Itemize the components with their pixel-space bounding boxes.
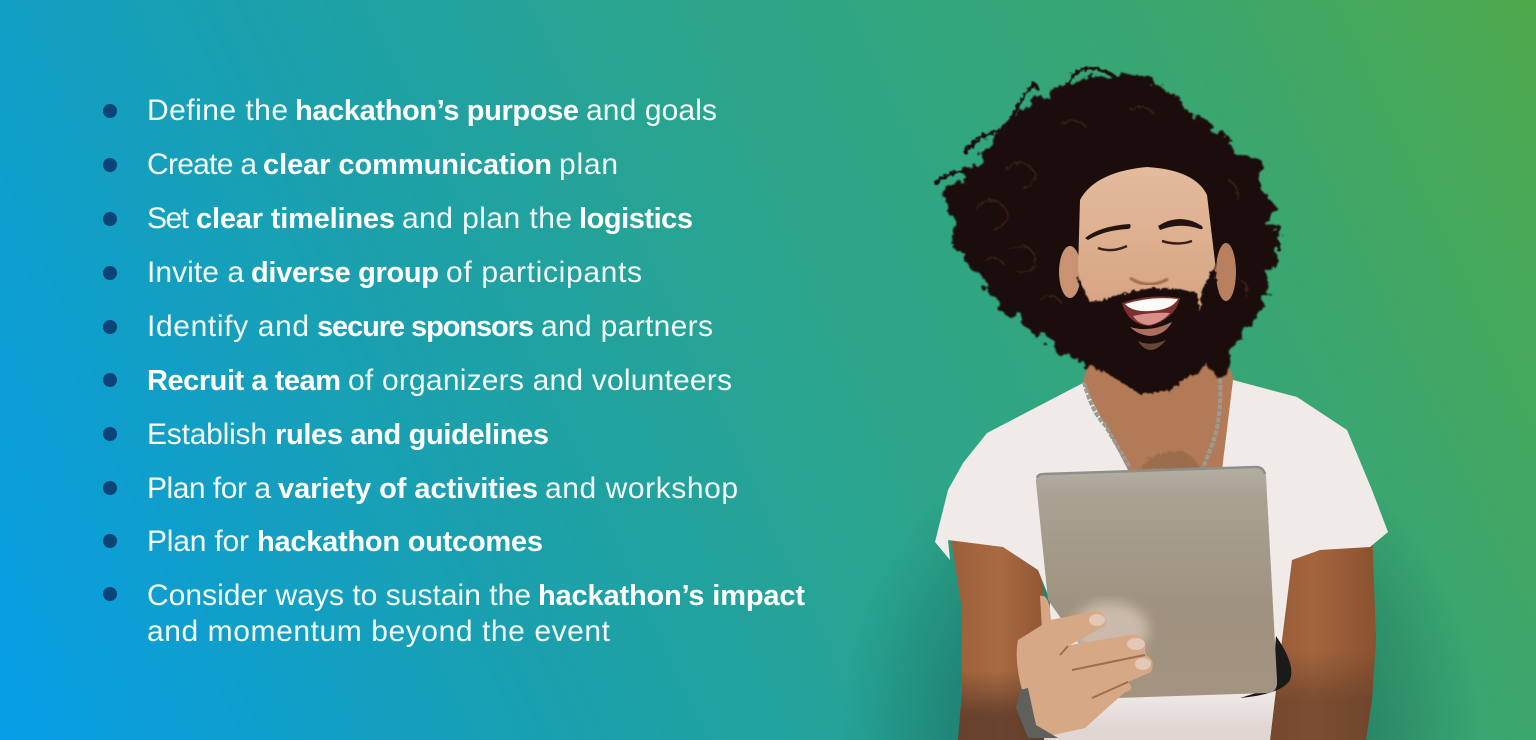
item: sustain impact: hackathon’s impact (538, 580, 805, 612)
item: outcomes (103, 525, 543, 558)
item: rules (103, 418, 549, 451)
person (935, 68, 1388, 740)
mouth (1122, 296, 1180, 326)
item: participants: Invite a (147, 256, 244, 289)
item: sustain impact (103, 579, 805, 648)
closed left eye (1098, 246, 1127, 250)
item: purpose: Define the (147, 94, 288, 127)
person shadow (840, 400, 1480, 740)
checklist (103, 94, 805, 648)
item: timelines: and plan the (402, 202, 572, 235)
watch (1016, 688, 1058, 738)
item: purpose: hackathon’s purpose (295, 95, 579, 127)
left forearm shade (958, 670, 1046, 740)
left arm (948, 520, 1048, 740)
item: sustain impact: Consider ways to sustain the (147, 579, 531, 612)
item: sponsors (103, 310, 713, 343)
shirt bottom shade (1044, 690, 1276, 740)
item: outcomes: hackathon outcomes (257, 526, 543, 558)
finger nails (1089, 614, 1151, 670)
item: participants (103, 256, 642, 289)
right ear (1216, 243, 1236, 301)
item: team (103, 364, 732, 397)
lip below mouth (1130, 322, 1172, 336)
item: communication: clear communication (263, 149, 552, 181)
item: activities: and workshop (545, 472, 738, 505)
thumb (1040, 596, 1052, 630)
hand (1017, 611, 1153, 738)
left ear (1059, 246, 1081, 298)
teeth (1125, 298, 1178, 311)
item: outcomes: Plan for (147, 525, 249, 558)
item: purpose: and goals (586, 94, 717, 127)
chin patch (1138, 340, 1166, 350)
item: sustain impact: and momentum beyond the event (147, 615, 611, 648)
item: rules: rules and guidelines (275, 419, 549, 451)
item: purpose (103, 94, 717, 127)
left eyebrow (1085, 224, 1131, 240)
item: timelines (103, 202, 693, 235)
wrist band (1240, 636, 1291, 698)
item: participants: diverse group (251, 257, 439, 289)
finger creases (1060, 646, 1145, 698)
item: rules: Establish (147, 418, 267, 451)
neck and chest (1082, 350, 1234, 480)
item: communication: Create a (147, 148, 257, 181)
item: sponsors: secure sponsors (317, 311, 534, 343)
item: activities: variety of activities (278, 473, 538, 505)
face (1078, 167, 1216, 385)
item: participants: of participants (446, 256, 642, 289)
hair wisps (936, 68, 1279, 250)
right forearm shade (1250, 650, 1375, 740)
item: team: Recruit a team (147, 365, 341, 397)
item: activities: Plan for a (147, 472, 271, 505)
item: communication: plan (559, 148, 618, 181)
item: sponsors: Identify and (147, 310, 309, 343)
item: timelines: clear timelines (196, 203, 395, 235)
tablet (1036, 467, 1277, 698)
hair (936, 68, 1279, 372)
tongue (1133, 313, 1170, 325)
item: sponsors: and partners (541, 310, 713, 343)
hair highlights (975, 107, 1247, 304)
chest hair (1140, 451, 1200, 470)
item: communication (103, 148, 618, 181)
necklace (1084, 372, 1220, 468)
right arm (1250, 525, 1376, 740)
item: team: of organizers and volunteers (348, 364, 732, 397)
right eyebrow (1158, 219, 1203, 230)
tablet glare (1072, 602, 1148, 658)
tablet top rim (1037, 467, 1265, 478)
beard (1077, 265, 1218, 394)
shirt (935, 380, 1388, 740)
item: timelines: Set (147, 202, 190, 235)
item: activities (103, 472, 738, 505)
item: timelines: logistics (579, 203, 693, 235)
nose shadow (1130, 278, 1168, 284)
closed right eye (1162, 241, 1192, 244)
